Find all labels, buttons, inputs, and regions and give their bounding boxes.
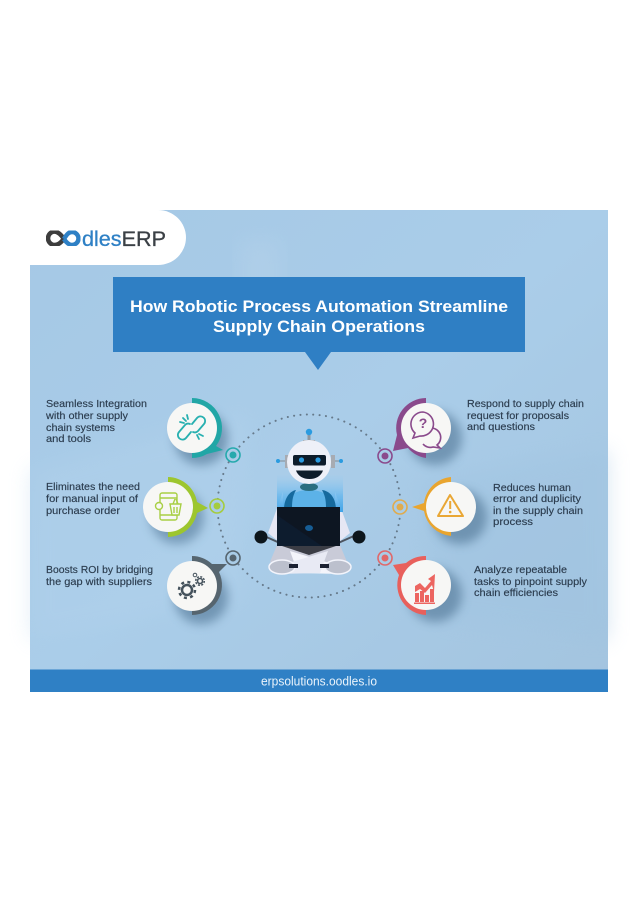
robot laptop xyxy=(277,507,340,555)
bubble shadow xyxy=(408,568,462,622)
bubble arc and pointer xyxy=(168,477,208,537)
caption: Seamless Integration xyxy=(46,399,147,410)
caption: with other supply xyxy=(45,411,129,422)
robot arms and legs xyxy=(262,492,356,574)
caption: Respond to supply chain xyxy=(467,399,584,410)
bubble arc and pointer xyxy=(192,398,223,458)
bubble disc xyxy=(401,403,451,453)
caption: in the supply chain xyxy=(493,506,583,517)
logo infinity mark xyxy=(48,232,78,245)
item: analyze tasks xyxy=(378,551,588,622)
footer bar xyxy=(30,670,608,692)
bubble arc and pointer xyxy=(393,556,426,615)
item: reduces human error xyxy=(393,477,583,544)
connector dot xyxy=(393,500,407,514)
bubble disc xyxy=(143,482,193,532)
dotted orbit ring xyxy=(218,414,400,598)
bubble disc xyxy=(401,560,451,610)
icon: gears xyxy=(179,573,204,598)
robot xyxy=(254,429,366,574)
item: manual input xyxy=(46,477,224,544)
logo badge xyxy=(30,210,186,265)
item: respond to requests xyxy=(378,398,584,465)
caption: Boosts ROI by bridging xyxy=(46,565,153,576)
caption: Analyze repeatable xyxy=(474,565,567,576)
title banner xyxy=(113,277,525,370)
bubble arc and pointer xyxy=(192,556,227,615)
connector dot xyxy=(378,551,392,565)
caption: purchase order xyxy=(46,506,121,517)
bubble arc and pointer xyxy=(393,398,426,458)
icon: chat bubbles xyxy=(411,412,441,448)
robot hands xyxy=(254,530,366,544)
robot head xyxy=(276,440,343,484)
caption: error and duplicity xyxy=(493,494,582,505)
robot antenna xyxy=(303,429,315,449)
robot torso glow xyxy=(277,475,343,512)
connector dot xyxy=(226,551,240,565)
robot torso xyxy=(284,483,336,510)
bubble disc xyxy=(167,403,217,453)
logo wordmark: dlesERP xyxy=(82,228,166,251)
bubble disc xyxy=(426,482,476,532)
title text: How Robotic Process Automation Streamline xyxy=(130,297,508,316)
icon: broken chain link xyxy=(178,415,205,440)
bubble shadow xyxy=(408,411,462,465)
caption: Reduces human xyxy=(493,483,571,494)
bubble arc and pointer xyxy=(412,477,451,536)
connector dot xyxy=(378,449,392,463)
caption: request for proposals xyxy=(467,411,569,422)
caption: Eliminates the need xyxy=(46,482,140,493)
caption: the gap with suppliers xyxy=(46,577,152,588)
bubble shadow xyxy=(174,570,228,624)
connector dot xyxy=(226,448,240,462)
item: boosts ROI xyxy=(46,551,240,624)
icon: phone with basket xyxy=(156,493,181,520)
caption: and tools xyxy=(46,434,91,445)
caption: process xyxy=(493,517,533,528)
connector dot xyxy=(210,499,224,513)
caption: for manual input of xyxy=(46,494,138,505)
icon: rising chart xyxy=(414,574,435,604)
icon: warning triangle xyxy=(438,495,463,516)
caption: chain efficiencies xyxy=(474,588,558,599)
title text: Supply Chain Operations xyxy=(213,317,425,336)
bubble shadow xyxy=(174,411,228,465)
caption: tasks to pinpoint supply xyxy=(474,577,588,588)
bubble disc xyxy=(167,561,217,611)
caption: chain systems xyxy=(46,423,115,434)
bubble shadow xyxy=(433,490,487,544)
footer url: erpsolutions.oodles.io xyxy=(261,674,377,688)
bubble shadow xyxy=(150,490,204,544)
icon: chat bubbles: ? xyxy=(419,415,427,431)
item: seamless integration xyxy=(45,398,240,465)
caption: and questions xyxy=(467,422,535,433)
panel: background xyxy=(30,210,608,692)
